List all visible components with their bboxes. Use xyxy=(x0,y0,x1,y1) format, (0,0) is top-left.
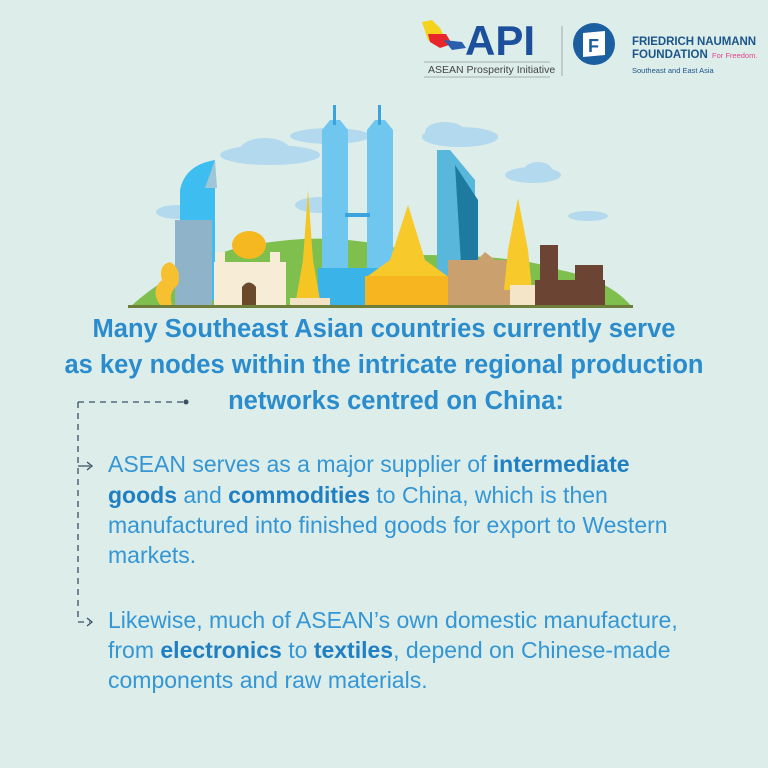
bullet 2: Likewise, much of ASEAN’s own domestic manufacture, xyxy=(108,607,678,633)
bullet 1: goods and commodities to China, which is then xyxy=(108,482,608,508)
skyline illustration xyxy=(128,105,633,308)
heading: Many Southeast Asian countries currently serve xyxy=(93,315,675,343)
bullet 2: components and raw materials. xyxy=(108,667,428,693)
bullet 1: markets. xyxy=(108,542,196,568)
connector: dashed bracket with arrows xyxy=(77,400,188,626)
logo: FNF text: For Freedom. xyxy=(712,51,757,60)
heading: as key nodes within the intricate regional production xyxy=(64,351,704,379)
logo: FNF text: FOUNDATION xyxy=(632,49,708,61)
logo: API text: API xyxy=(465,17,535,64)
logo: FNF text: Southeast and East Asia xyxy=(632,66,715,75)
heading: networks centred on China: xyxy=(228,387,564,415)
bullet 2: from electronics to textiles, depend on Chinese-made xyxy=(108,637,671,663)
heading xyxy=(64,315,704,415)
logo: FNF circle xyxy=(573,23,615,65)
logos header xyxy=(422,17,757,78)
logo: FNF text: FRIEDRICH NAUMANN xyxy=(632,36,756,48)
logo: API map xyxy=(422,20,466,50)
logo: FNF circle: F xyxy=(588,36,599,56)
bullet 2 xyxy=(108,607,678,693)
logo: ASEAN Prosperity Initiative: ASEAN Prosperity Initiative xyxy=(428,64,555,76)
bullet 1 xyxy=(108,451,668,568)
logo: FNF text xyxy=(632,36,757,75)
bullet 1: ASEAN serves as a major supplier of intermediate xyxy=(108,451,630,477)
bullet 1: manufactured into finished goods for export to Western xyxy=(108,512,668,538)
